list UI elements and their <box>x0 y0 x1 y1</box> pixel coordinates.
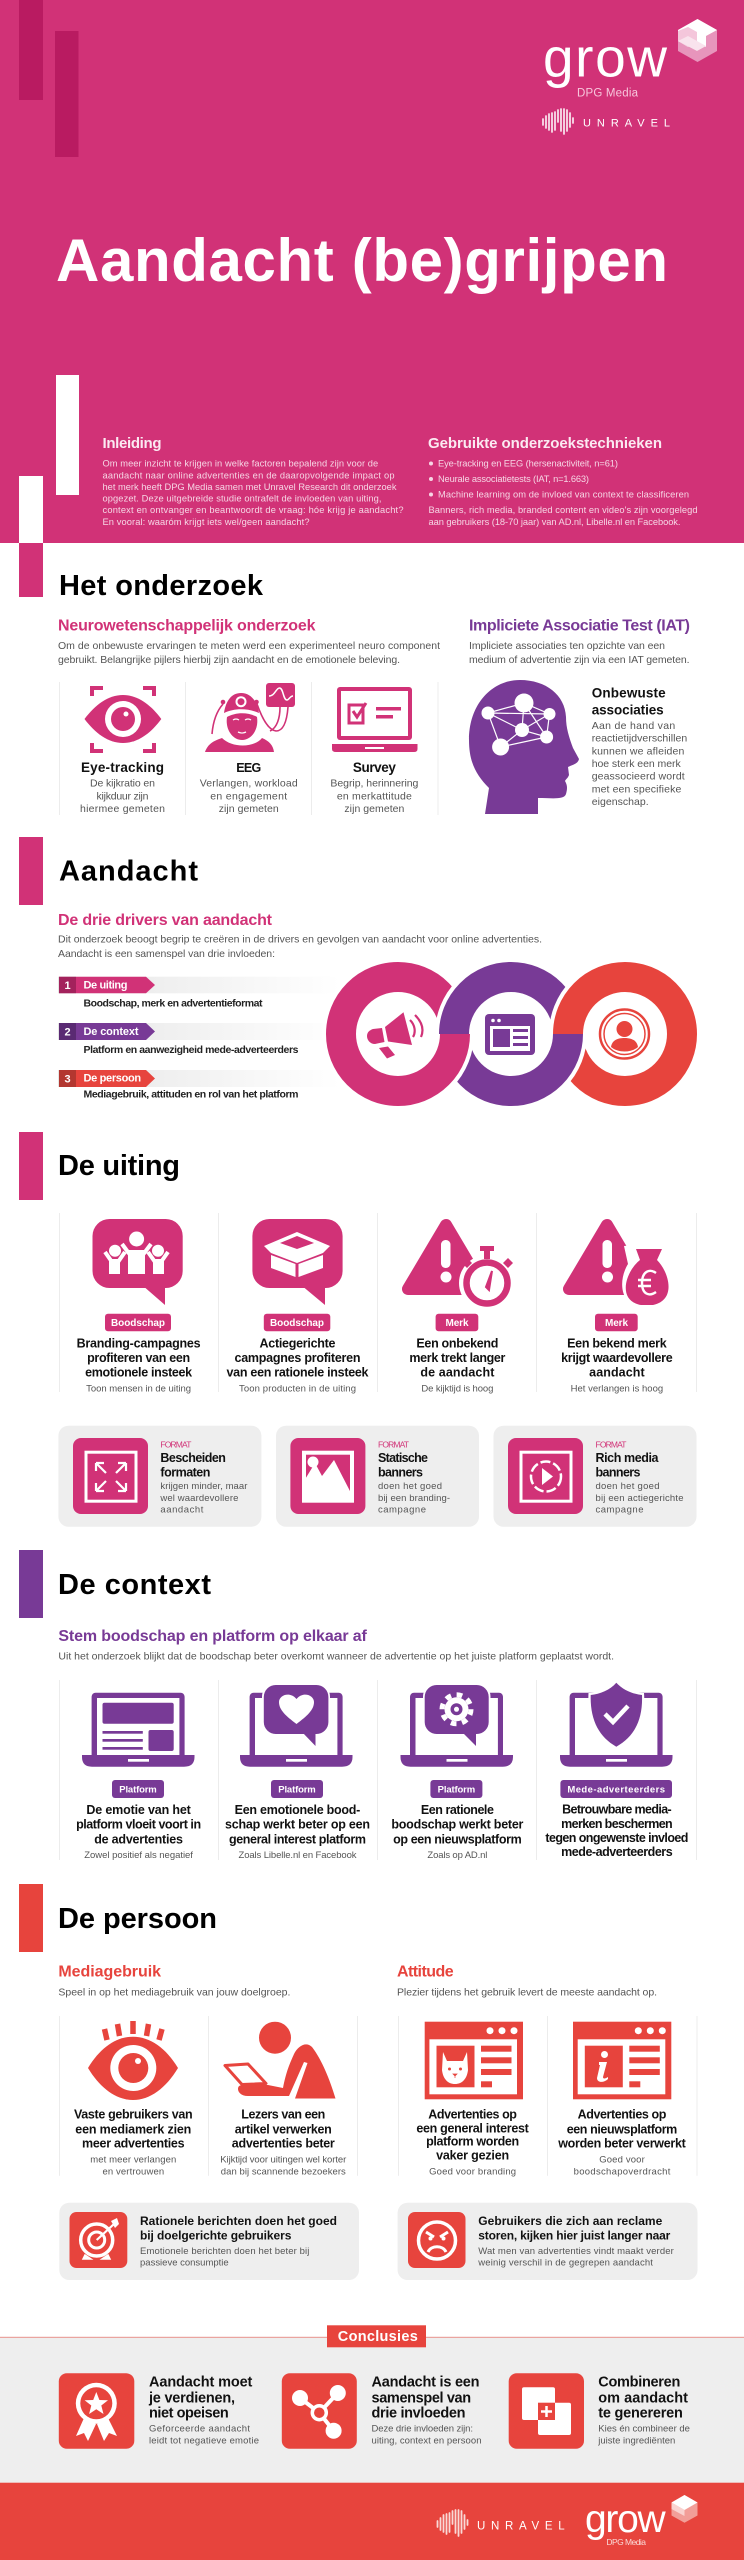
logo: grow footer: grow <box>585 2498 667 2541</box>
card: Bescheiden formaten: FORMAT <box>160 1440 191 1450</box>
panel: Emotionele boodschap <box>225 1684 370 1861</box>
text block: Stem boodschap en platform <box>58 1628 614 1662</box>
text block: Onbewuste associaties: associaties <box>592 702 664 717</box>
conclusion: Samenspel <box>282 2373 482 2449</box>
card: Statische banners: FORMAT <box>378 1440 409 1450</box>
icon: survey laptop <box>332 687 418 752</box>
conclusion: Aandacht verdienen: Geforceerde aandacht <box>149 2424 250 2435</box>
card: Bescheiden formaten: wel waardevollere <box>159 1493 238 1504</box>
conclusion: Combineren: juiste ingrediënten <box>597 2435 675 2446</box>
icon: combined squares <box>509 2373 584 2449</box>
tag: Boodschap <box>105 1314 171 1331</box>
card: Bescheiden formaten <box>58 1426 261 1527</box>
panel: Bekend merk: Een bekend merk <box>567 1336 667 1350</box>
panel: General interest platform: Goed voor branding <box>429 2166 516 2177</box>
section bar: Aandacht <box>19 837 43 905</box>
text block: De drie drivers van aandacht: Dit onderzoek beoogt begrip te creëren in de drivers en gevolgen van aandacht voor online advertenties. <box>58 934 542 946</box>
panel: Lezers van artikel: Kijktijd voor uitingen wel korter <box>220 2155 346 2166</box>
icon: connected nodes <box>282 2373 357 2449</box>
chart: interlocking rings of three drivers <box>341 977 682 1091</box>
panel: EEG: en engagement <box>210 790 287 802</box>
callout: Gebruikers die zich storen <box>398 2203 698 2280</box>
card: Rich media banners: Rich media <box>596 1451 660 1465</box>
panel: Emotionele boodschap: schap werkt beter op een <box>225 1818 370 1832</box>
text block: De drie drivers van aandacht: De drie drivers van aandacht <box>58 912 273 929</box>
panel: Emotionele boodschap: general interest platform <box>229 1832 366 1846</box>
icon: image <box>290 1438 365 1514</box>
list item: De uiting: 1 <box>64 980 71 992</box>
tag: Platform: Platform <box>278 1785 316 1796</box>
icon: laptop with article <box>82 1693 194 1767</box>
panel: Eye-tracking: hiermee gemeten <box>80 803 165 815</box>
conclusion: Combineren: te genereren <box>598 2406 683 2422</box>
text block: Neurowetenschappelijk onderzoek <box>58 618 440 666</box>
tag: Merk <box>595 1314 638 1331</box>
panel: Nieuwsplatform: een nieuwsplatform <box>567 2122 677 2136</box>
heading: Conclusies <box>327 2325 426 2347</box>
tag: Merk <box>436 1314 478 1331</box>
tag: Boodschap <box>264 1314 330 1331</box>
panel: Eye-tracking: Eye-tracking <box>81 760 164 775</box>
text block: Neurowetenschappelijk onderzoek: Om de onbewuste ervaringen te meten werd een experimenteel neuro component <box>58 640 440 652</box>
section bar: De context <box>19 1550 43 1618</box>
panel: Survey: Survey <box>353 760 396 775</box>
text block: Inleiding: het merk heeft DPG Media samen met Unravel Research dit onderzoek <box>102 482 397 492</box>
logo: grow DPG Media: grow <box>543 27 667 89</box>
panel: Nieuwsplatform <box>557 2022 687 2177</box>
panel: Onbekend merk <box>408 1225 515 1394</box>
panel: Betrouwbare mediamerken: tegen ongewenste invloed <box>545 1831 688 1845</box>
list item: De context: De context <box>84 1026 139 1038</box>
tag: Platform <box>112 1780 164 1798</box>
text block: Gebruikte onderzoekstechnieken: aan gebruikers (18-70 jaar) van AD.nl, Libelle.nl en Facebook. <box>428 517 680 527</box>
icon: speech bubble with people <box>92 1219 183 1305</box>
text block: Inleiding <box>102 435 404 527</box>
icon: laptop with heart bubble <box>240 1684 352 1767</box>
list item: De context <box>58 1023 340 1056</box>
text block: Onbewuste associaties: Onbewuste <box>592 686 666 701</box>
conclusion: Combineren: Kies én combineer de <box>598 2424 690 2435</box>
text block: Impliciete Associatie Test: medium of advertentie zijn via een IAT gemeten. <box>469 654 690 666</box>
panel: Lezers van artikel: dan bij scannende bezoekers <box>221 2166 346 2177</box>
panel: Vaste gebruikers: Vaste gebruikers van <box>74 2108 193 2122</box>
icon: megaphone <box>367 1012 423 1058</box>
icon: warning with stopwatch <box>408 1225 515 1311</box>
icon: laptop with gear bubble <box>400 1684 513 1767</box>
tag: Merk: Merk <box>605 1318 628 1329</box>
conclusion: Samenspel: uiting, context en persoon <box>372 2435 482 2446</box>
callout: Rationele berichten: bij doelgerichte gebruikers <box>140 2228 292 2242</box>
panel: Branding-campagnes: profiteren van een <box>87 1351 190 1365</box>
text block: Onbewuste associaties: Aan de hand van <box>592 720 675 732</box>
icon: EEG head <box>205 683 295 752</box>
text block: Onbewuste associaties: kunnen we afleiden <box>592 745 684 757</box>
conclusion: Combineren: Combineren <box>598 2375 680 2391</box>
icon: red eye with lashes <box>88 2021 178 2100</box>
panel: Nieuwsplatform: Advertenties op <box>578 2108 667 2122</box>
title: Aandacht (be)grijpen <box>56 227 668 294</box>
card: Rich media banners: bij een actiegerichte <box>596 1493 684 1504</box>
text block: Onbewuste associaties: reactietijdverschillen <box>592 733 687 745</box>
section bar: De uiting <box>19 1132 43 1200</box>
panel: Bekend merk <box>561 1225 673 1394</box>
text block: Onbewuste associaties <box>592 686 687 808</box>
panel: Emotie van platform <box>76 1693 201 1861</box>
text block: Gebruikte onderzoekstechnieken: Banners, rich media, branded content en video's zijn voorgelegd <box>428 505 698 515</box>
conclusion: Aandacht verdienen: niet opeisen <box>149 2406 229 2422</box>
panel: General interest platform <box>416 2022 530 2177</box>
panel: Lezers van artikel <box>220 2022 346 2177</box>
panel: General interest platform: een general interest <box>416 2121 530 2135</box>
icon: speech bubble with box <box>252 1219 343 1305</box>
card: Statische banners: banners <box>378 1466 423 1480</box>
panel: Survey: zijn gemeten <box>344 803 405 815</box>
text block: Inleiding: opgezet. Deze uitgebreide studie ontrafelt de invloeden van uiting, <box>102 494 382 504</box>
callout: Gebruikers die zich storen: storen, kijken hier juist langer naar <box>478 2228 671 2242</box>
text block: Onbewuste associaties: eigenschap. <box>592 796 649 808</box>
panel: Conclusies background <box>0 2337 744 2483</box>
list item: De persoon: 3 <box>64 1074 71 1086</box>
panel: Lezers van artikel: Lezers van een <box>241 2108 325 2122</box>
panel: EEG: EEG <box>236 761 261 775</box>
icon: award rosette <box>59 2373 134 2449</box>
panel: Onbekend merk: Een onbekend <box>416 1336 498 1350</box>
panel: Rationele boodschap: Zoals op AD.nl <box>427 1850 487 1861</box>
icon: browser with cat <box>425 2022 523 2099</box>
logo: grow footer <box>585 2495 698 2547</box>
list item: De persoon <box>58 1070 340 1101</box>
list item: De uiting <box>58 977 340 1010</box>
icon: resize arrows <box>73 1438 148 1514</box>
panel: Vaste gebruikers: een mediamerk zien <box>75 2122 191 2136</box>
list item: De persoon: De persoon <box>84 1073 141 1085</box>
list item: De context: 2 <box>64 1026 71 1038</box>
panel: Eye-tracking: De kijkratio en <box>90 778 155 790</box>
tag: Platform: Platform <box>119 1785 157 1796</box>
panel: Eye-tracking: kijkduur zijn <box>96 790 149 802</box>
tag: Merk: Merk <box>446 1318 469 1329</box>
card: Rich media banners: banners <box>596 1466 641 1480</box>
text block: De drie drivers van aandacht <box>58 912 542 960</box>
panel: Actiegerichte campagnes: campagnes profiteren <box>234 1351 360 1365</box>
conclusion: Samenspel: samenspel van <box>372 2390 471 2406</box>
card: Rich media banners: FORMAT <box>596 1440 626 1450</box>
panel: General interest platform: platform worden <box>426 2135 519 2149</box>
card: Bescheiden formaten: aandacht <box>160 1505 204 1516</box>
text block: Stem boodschap en platform: Stem boodschap en platform op elkaar af <box>58 1628 367 1645</box>
icon: person in circle <box>600 1010 649 1058</box>
heading: Het onderzoek: Het onderzoek <box>59 570 264 602</box>
conclusion: Samenspel: drie invloeden <box>372 2406 466 2422</box>
logo: grow footer: DPG Media <box>606 2537 646 2547</box>
card: Statische banners: bij een branding- <box>378 1493 450 1504</box>
text block: Onbewuste associaties: geassocieerd wordt <box>592 771 685 783</box>
conclusion: Aandacht verdienen: leidt tot negatieve emotie <box>149 2435 259 2446</box>
panel: Bekend merk: aandacht <box>589 1365 645 1379</box>
panel: Onbekend merk: merk trekt langer <box>409 1351 506 1365</box>
panel: Branding-campagnes: Toon mensen in de uiting <box>86 1383 191 1394</box>
section bar: Het onderzoek <box>19 543 43 597</box>
text block: Inleiding: Inleiding <box>102 435 162 452</box>
text block: De drie drivers van aandacht: Aandacht is een samenspel van drie invloeden: <box>58 948 275 960</box>
panel: EEG: zijn gemeten <box>219 803 279 815</box>
text block: Attitude <box>397 1964 657 1999</box>
text block: Impliciete Associatie Test: Impliciete associaties ten opzichte van een <box>469 640 665 652</box>
panel: Onbekend merk: de aandacht <box>420 1365 495 1379</box>
card: Statische banners: campagne <box>378 1505 426 1516</box>
text block: Gebruikte onderzoekstechnieken: Neurale associatietests (IAT, n=1.663) <box>438 474 589 484</box>
heading: De uiting: De uiting <box>58 1150 180 1182</box>
panel: Betrouwbare mediamerken: merken beschermen <box>561 1817 673 1831</box>
text block: Attitude: Attitude <box>397 1964 454 1981</box>
card: Statische banners: doen het goed <box>378 1481 442 1492</box>
panel: Emotionele boodschap: Een emotionele bood- <box>235 1803 360 1817</box>
panel: Rationele boodschap <box>391 1684 524 1861</box>
panel: Emotie van platform: Zowel positief als negatief <box>84 1850 193 1861</box>
heading: Aandacht: Aandacht <box>59 856 198 888</box>
panel: Eye-tracking <box>80 688 165 815</box>
icon: angry face <box>408 2212 466 2268</box>
panel: Betrouwbare mediamerken: mede-adverteerders <box>561 1845 673 1859</box>
callout: Gebruikers die zich storen: weinig verschil in de gegrepen aandacht <box>477 2258 653 2269</box>
panel: Survey: en merkattitude <box>337 790 412 802</box>
icon: laptop with shield <box>560 1680 672 1767</box>
conclusion: Combineren <box>509 2373 690 2449</box>
panel: Emotionele boodschap: Zoals Libelle.nl en Facebook <box>238 1850 357 1861</box>
text block: Mediagebruik: Mediagebruik <box>58 1964 161 1981</box>
panel: Emotie van platform: de advertenties <box>94 1832 183 1846</box>
panel: Betrouwbare mediamerken <box>545 1680 688 1859</box>
panel: Survey <box>330 687 419 815</box>
text block: Neurowetenschappelijk onderzoek: gebruikt. Belangrijke pijlers hierbij zijn aandacht en de emotionele beleving. <box>58 654 400 666</box>
section bar: De persoon <box>19 1884 43 1952</box>
heading: De context: De context <box>58 1569 211 1601</box>
logo: Unravel footer <box>438 2510 565 2536</box>
text block: Attitude: Plezier tijdens het gebruik levert de meeste aandacht op. <box>397 1987 657 1999</box>
icon: browser with info <box>573 2022 671 2099</box>
conclusion: Aandacht verdienen <box>59 2373 259 2449</box>
panel: footer <box>0 2483 744 2560</box>
tag: Boodschap: Boodschap <box>111 1318 165 1329</box>
panel: Lezers van artikel: artikel verwerken <box>235 2122 332 2136</box>
conclusion: Aandacht verdienen: Aandacht moet <box>149 2375 253 2391</box>
text block: Stem boodschap en platform: Uit het onderzoek blijkt dat de boodschap beter overkomt wanneer de advertentie op het juiste platform geplaatst wordt. <box>58 1650 614 1662</box>
text block: Impliciete Associatie Test: Impliciete Associatie Test (IAT) <box>469 618 690 635</box>
panel: Branding-campagnes: Branding-campagnes <box>77 1336 201 1350</box>
heading: De persoon: De persoon <box>58 1903 217 1935</box>
icon: warning with money bag <box>569 1225 672 1310</box>
callout: Gebruikers die zich storen: Gebruikers die zich aan reclame <box>478 2214 663 2228</box>
panel: Rationele boodschap: op een nieuwsplatform <box>393 1832 522 1846</box>
conclusion: Samenspel: Aandacht is een <box>372 2375 480 2391</box>
text block: Inleiding: context en ontvanger en beantwoordt de vraag: hóe krijg je aandacht? <box>102 505 404 515</box>
conclusion: Combineren: om aandacht <box>598 2390 688 2406</box>
card: Statische banners: Statische <box>378 1451 428 1465</box>
panel: Branding-campagnes: emotionele insteek <box>85 1365 192 1379</box>
text block: Onbewuste associaties: hoe sterk een merk <box>592 758 681 770</box>
card: Rich media banners <box>494 1426 696 1527</box>
tag: Mede-adverteerders <box>560 1780 672 1798</box>
tag: Platform <box>271 1780 323 1798</box>
panel: EEG <box>200 683 298 815</box>
panel: EEG: Verlangen, workload <box>200 778 298 790</box>
card: Bescheiden formaten: Bescheiden <box>160 1451 226 1465</box>
panel: Actiegerichte campagnes <box>226 1219 369 1394</box>
callout: Rationele berichten <box>59 2203 359 2280</box>
callout: Gebruikers die zich storen: Wat men van advertenties vindt maakt verder <box>478 2246 674 2257</box>
card: Bescheiden formaten: krijgen minder, maar <box>160 1481 247 1492</box>
icon: play button <box>508 1438 583 1514</box>
text block: Inleiding: En vooral: waaróm krijgt iets wel/geen aandacht? <box>102 517 310 527</box>
text block: Gebruikte onderzoekstechnieken: Gebruikte onderzoekstechnieken <box>428 435 662 452</box>
tag: Platform <box>430 1780 482 1798</box>
panel: Onbekend merk: De kijktijd is hoog <box>421 1383 493 1394</box>
text block: Inleiding: aandacht naar online advertenties en de daaropvolgende impact op <box>102 470 394 480</box>
panel: Lezers van artikel: advertenties beter <box>232 2137 335 2151</box>
icon: eye with focus brackets <box>84 688 161 751</box>
panel: Nieuwsplatform: Goed voor <box>599 2155 645 2166</box>
text block: Gebruikte onderzoekstechnieken <box>428 435 698 527</box>
panel: Vaste gebruikers: en vertrouwen <box>102 2166 164 2177</box>
panel: Nieuwsplatform: boodschapoverdracht <box>574 2166 671 2177</box>
card: Bescheiden formaten: formaten <box>160 1466 210 1480</box>
list item: De uiting: De uiting <box>84 980 128 992</box>
panel: Vaste gebruikers: meer advertenties <box>82 2137 185 2151</box>
list item: De context: Platform en aanwezigheid mede-adverteerders <box>84 1044 299 1056</box>
icon: browser window <box>485 1014 535 1055</box>
panel: General interest platform: Advertenties op <box>428 2108 517 2122</box>
tag: Platform: Platform <box>438 1785 475 1796</box>
panel: Nieuwsplatform: worden beter verwerkt <box>557 2137 687 2151</box>
text block: Neurowetenschappelijk onderzoek: Neurowetenschappelijk onderzoek <box>58 618 316 635</box>
text block: Gebruikte onderzoekstechnieken: Eye-tracking en EEG (hersenactiviteit, n=61) <box>438 459 618 469</box>
panel: General interest platform: vaker gezien <box>436 2148 509 2162</box>
list item: De uiting: Boodschap, merk en advertentieformat <box>84 998 263 1010</box>
text block: Gebruikte onderzoekstechnieken: Machine learning om de invloed van context te classificeren <box>438 490 689 500</box>
heading: Conclusies: Conclusies <box>338 2329 418 2345</box>
panel: Actiegerichte campagnes: Toon producten in de uiting <box>239 1383 356 1394</box>
conclusion: Samenspel: Deze drie invloeden zijn: <box>372 2424 473 2435</box>
callout: Rationele berichten: passieve consumptie <box>140 2258 229 2269</box>
panel: Emotie van platform: platform vloeit voort in <box>76 1818 201 1832</box>
logo: Unravel footer: UNRAVEL <box>477 2520 565 2532</box>
panel: Bekend merk: krijgt waardevollere <box>561 1351 673 1365</box>
logo: grow DPG Media: DPG Media <box>577 88 639 100</box>
icon: reader with tablet <box>225 2022 336 2098</box>
panel: Emotie van platform: De emotie van het <box>86 1803 192 1817</box>
callout: Rationele berichten: Emotionele berichten doen het beter bij <box>140 2246 309 2257</box>
card: Rich media banners: campagne <box>596 1505 644 1516</box>
card: Statische banners <box>276 1426 479 1527</box>
card: Rich media banners: doen het goed <box>596 1481 660 1492</box>
icon: target <box>70 2212 127 2268</box>
panel: Rationele boodschap: boodschap werkt beter <box>391 1818 524 1832</box>
logo: grow DPG Media <box>543 19 717 100</box>
panel: Survey: Begrip, herinnering <box>330 778 419 790</box>
panel: Branding-campagnes <box>77 1219 201 1394</box>
panel: Vaste gebruikers <box>74 2021 193 2177</box>
panel: hero <box>0 0 744 543</box>
conclusion: Aandacht verdienen: je verdienen, <box>148 2390 235 2406</box>
text block: Inleiding: Om meer inzicht te krijgen in welke factoren bepalend zijn voor de <box>102 459 378 469</box>
list item: De persoon: Mediagebruik, attituden en rol van het platform <box>84 1089 298 1101</box>
tag: Boodschap: Boodschap <box>270 1318 324 1329</box>
panel: Actiegerichte campagnes: Actiegerichte <box>260 1336 336 1350</box>
text block: Mediagebruik: Speel in op het mediagebruik van jouw doelgroep. <box>58 1987 290 1999</box>
callout: Rationele berichten: Rationele berichten doen het goed <box>140 2214 337 2228</box>
text block: Mediagebruik <box>58 1964 290 1999</box>
panel: Vaste gebruikers: met meer verlangen <box>90 2155 176 2166</box>
panel: Rationele boodschap: Een rationele <box>421 1803 494 1817</box>
text block: Impliciete Associatie Test <box>469 618 690 666</box>
panel: Actiegerichte campagnes: van een rationele insteek <box>226 1365 369 1379</box>
text block: Onbewuste associaties: met een specifieke <box>592 783 681 795</box>
panel: Bekend merk: Het verlangen is hoog <box>571 1383 663 1394</box>
tag: Mede-adverteerders: Mede-adverteerders <box>567 1785 665 1796</box>
logo: Unravel: UNRAVEL <box>583 118 670 130</box>
icon: head with network <box>469 680 579 814</box>
panel: Betrouwbare mediamerken: Betrouwbare media- <box>562 1802 672 1816</box>
logo: Unravel <box>543 109 670 134</box>
